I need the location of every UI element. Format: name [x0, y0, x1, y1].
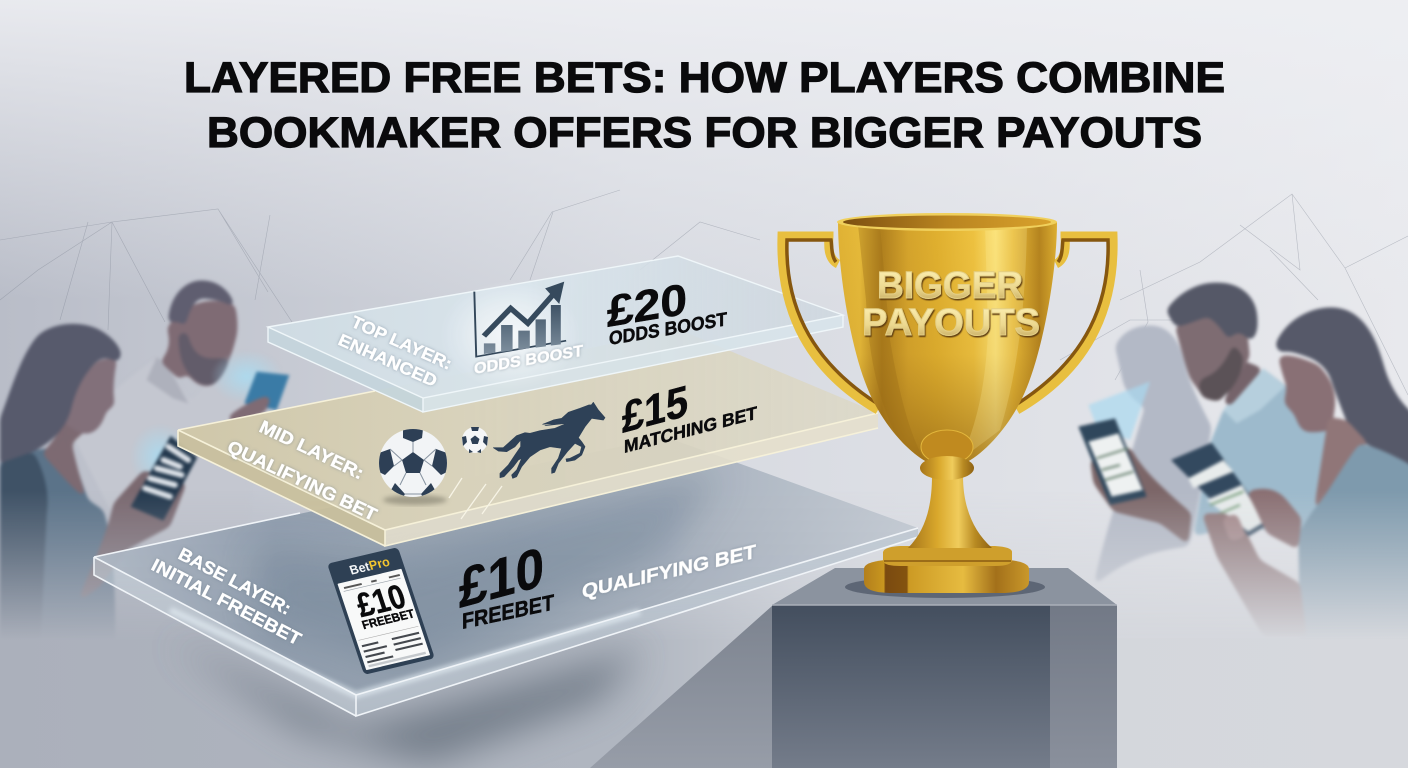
people: left group	[0, 280, 289, 653]
front phone screen	[1188, 460, 1265, 532]
ball shadow	[383, 495, 447, 505]
man, beard	[178, 332, 230, 385]
trophy	[782, 213, 1113, 598]
panel: mid layer	[178, 330, 878, 546]
top layer label: ENHANCED	[335, 330, 440, 391]
shadow person	[1093, 325, 1212, 587]
plate faces	[268, 256, 843, 412]
man, beard	[1198, 343, 1243, 402]
panel: top layer	[268, 256, 843, 412]
woman, arm	[77, 470, 187, 603]
mid caption: MATCHING BET	[624, 402, 757, 457]
woman, right hand	[1247, 489, 1302, 550]
man, hair	[168, 280, 236, 328]
phone glow	[130, 423, 190, 490]
dark strap	[0, 452, 48, 653]
odds boost chart caption: ODDS BOOST	[474, 342, 583, 378]
top amount: £20	[607, 275, 687, 337]
man, hair	[1166, 283, 1258, 342]
background network lines	[0, 190, 1408, 395]
bigger payouts engraving: PAYOUTS	[862, 302, 1040, 344]
man, shirt	[73, 357, 252, 557]
back phone rows	[1097, 448, 1133, 480]
thumb	[1222, 513, 1247, 542]
blue phone	[244, 372, 289, 410]
man, neck	[1223, 360, 1263, 407]
podium	[772, 568, 1117, 768]
woman, neck	[1313, 417, 1368, 513]
back phone	[1078, 418, 1147, 505]
woman, face	[1278, 355, 1335, 432]
panel: base layer	[94, 437, 918, 716]
cup bowl	[838, 222, 1057, 464]
man, shirt	[1193, 368, 1340, 543]
motion lines	[449, 478, 502, 519]
betting slip card: BetPro	[348, 554, 392, 578]
left handle	[782, 236, 878, 410]
woman, neck and chest	[42, 410, 90, 500]
back phone arm	[1090, 447, 1192, 545]
betting slip card	[327, 547, 435, 675]
cup rim	[837, 213, 1057, 231]
man, collar	[1223, 368, 1285, 423]
chart icon	[474, 282, 566, 357]
stem knob	[920, 456, 974, 480]
title	[184, 54, 1225, 157]
phone rows	[145, 447, 188, 497]
dark phone	[131, 436, 197, 521]
mid amount: £15	[622, 376, 688, 443]
man, hand	[227, 395, 277, 423]
woman, face	[60, 357, 117, 434]
woman, left arm	[1202, 513, 1307, 637]
betting slip card: £10	[351, 577, 410, 624]
title: BOOKMAKER OFFERS FOR BIGGER PAYOUTS	[207, 109, 1202, 157]
phone glow	[210, 350, 283, 403]
base caption: FREEBET	[462, 590, 554, 634]
bottom fog	[0, 490, 1408, 768]
woman, top	[1298, 443, 1408, 653]
mid layer label: MID LAYER:	[256, 417, 367, 483]
woman, hair	[0, 324, 122, 467]
title: LAYERED FREE BETS: HOW PLAYERS COMBINE	[184, 54, 1225, 102]
top layer label	[335, 312, 455, 391]
back phone screen	[1088, 433, 1143, 497]
screen glow	[1088, 382, 1150, 440]
bigger payouts engraving: BIGGER	[877, 265, 1023, 307]
foot	[864, 546, 1029, 593]
trophy shadow	[845, 576, 1045, 598]
base amount: £10	[459, 535, 544, 621]
bigger payouts engraving	[862, 265, 1040, 344]
base layer label: INITIAL FREEBET	[148, 555, 305, 649]
plate shadows and beam	[170, 606, 772, 768]
right handle	[1017, 236, 1113, 410]
front phone	[1171, 443, 1270, 537]
woman, body	[0, 445, 115, 653]
betting slip card: FREEBET	[361, 608, 416, 632]
qualifying bet label: QUALIFYING BET	[582, 542, 756, 603]
man, neck and face	[160, 301, 237, 386]
plate faces	[178, 330, 878, 546]
people: right group	[1078, 283, 1408, 653]
stem	[908, 476, 992, 548]
top layer label: TOP LAYER:	[348, 312, 455, 374]
front phone green rows	[1210, 492, 1243, 515]
woman, hair	[1275, 307, 1408, 470]
top caption: ODDS BOOST	[609, 309, 727, 350]
mid layer label: QUALIFYING BET	[224, 437, 380, 525]
horse silhouette	[493, 402, 605, 478]
large soccer ball	[379, 429, 447, 497]
man, collar shade	[147, 357, 188, 403]
base layer label: BASE LAYER:	[175, 544, 294, 619]
plate faces	[94, 437, 918, 716]
small soccer ball	[462, 427, 488, 453]
man, face	[1175, 317, 1250, 402]
